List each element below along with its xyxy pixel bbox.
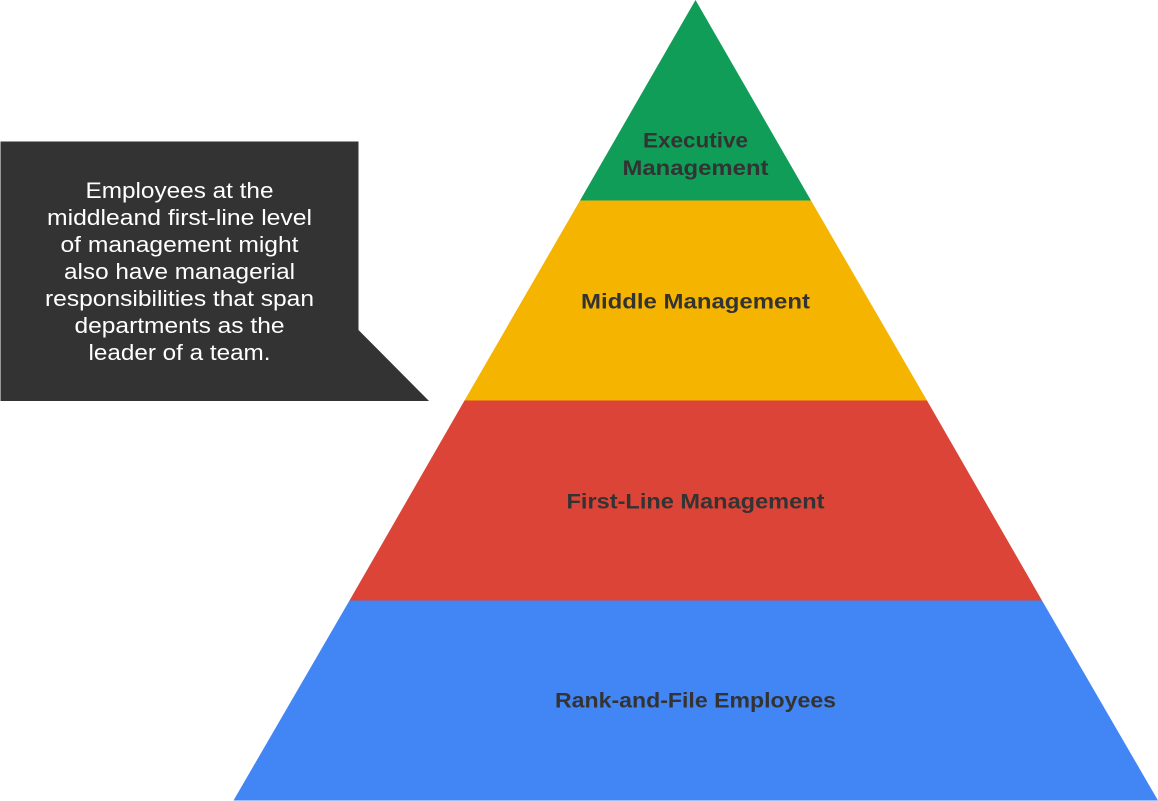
pyramid tier: first-line management: First-Line Management	[566, 490, 824, 514]
pyramid tier: middle management	[464, 200, 927, 400]
pyramid tier: rank-and-file employees: Rank-and-File Employees	[555, 688, 836, 712]
callout: leader of a team.	[88, 340, 270, 365]
pyramid tier: middle management: Middle Management	[581, 290, 810, 314]
callout: Employees at the	[86, 178, 274, 203]
callout: of management might	[60, 232, 299, 257]
callout	[0, 142, 429, 401]
callout: middleand first-line level	[47, 205, 312, 230]
pyramid tier: executive management: Executive	[643, 128, 748, 152]
pyramid tier: first-line management	[350, 400, 1042, 600]
pyramid tier: executive management: Management	[622, 156, 768, 180]
pyramid tier: rank-and-file employees	[234, 600, 1158, 800]
callout: departments as the	[74, 313, 284, 338]
pyramid tier: executive management	[580, 0, 811, 200]
callout: responsibilities that span	[45, 286, 314, 311]
callout: also have managerial	[64, 259, 295, 284]
